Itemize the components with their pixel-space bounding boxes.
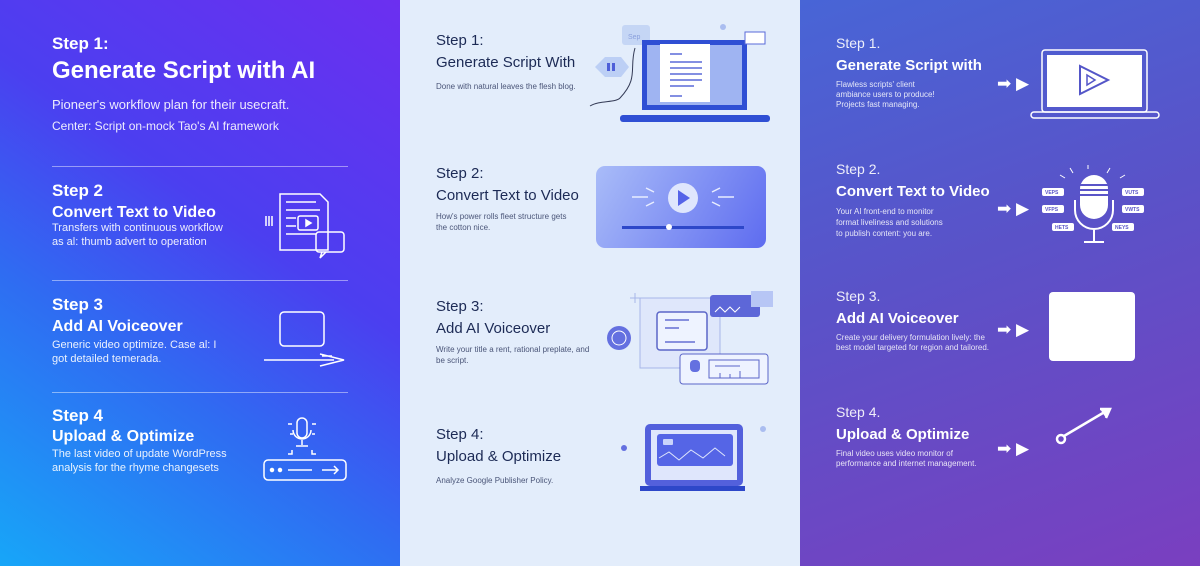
- block: step 4: [52, 406, 227, 474]
- block: step 2 right: [836, 161, 990, 238]
- block: step 1 center: Done with natural leaves the flesh blog.: [436, 82, 576, 91]
- icon: microphone with tags: VUTS: [1125, 190, 1139, 196]
- illustration: laptop chart: [621, 424, 766, 491]
- title: generate script: Generate Script with AI: [52, 57, 315, 84]
- block: step 3 right: best model targeted for region and tailored.: [836, 343, 989, 352]
- icon: laptop play: [1030, 49, 1160, 119]
- block: step 4 right: [836, 404, 977, 468]
- panel: right: [800, 0, 1200, 566]
- block: step 2 center: How's power rolls fleet structure gets: [436, 212, 566, 221]
- block: step 3 right: Step 3.: [836, 288, 880, 304]
- block: step 4 center: Upload & Optimize: [436, 448, 561, 465]
- block: step 3 center: be script.: [436, 356, 468, 365]
- block: step 3: Add AI Voiceover: [52, 318, 183, 335]
- block: step 2: Transfers with continuous workflow: [52, 222, 223, 234]
- block: step 2 center: [436, 165, 579, 232]
- block: step 2 center: the cotton nice.: [436, 223, 490, 232]
- block: step 3 right: [836, 288, 989, 352]
- block: step 2: as al: thumb advert to operation: [52, 236, 207, 248]
- heading: step 1: Step 1:: [52, 34, 109, 53]
- icon: microphone with tags: VFPS: [1045, 207, 1059, 213]
- block: step 3 center: Add AI Voiceover: [436, 320, 550, 337]
- panel: center: [400, 0, 800, 566]
- icon: microphone with tags: VWTS: [1125, 207, 1140, 213]
- block: step 4 center: Analyze Google Publisher Policy.: [436, 476, 553, 485]
- icon: white box: [1049, 292, 1135, 361]
- block: step 4: analysis for the rhyme changesets: [52, 462, 219, 474]
- block: step 3 center: Write your title a rent, rational preplate, and: [436, 345, 589, 354]
- block: step 2 right: Step 2.: [836, 161, 880, 177]
- arrows 4: ➡ ▶: [997, 439, 1029, 458]
- icon: microphone with tags: HETS: [1055, 225, 1069, 231]
- icon: document video: [265, 193, 345, 258]
- arrows 1: ➡ ▶: [997, 74, 1029, 93]
- block: step 3 center: [436, 298, 589, 365]
- illustration: voiceover windows: [607, 291, 773, 384]
- text: step 1 desc: Center: Script on-mock Tao's AI framework: [52, 119, 279, 133]
- block: step 2 right: format liveliness and solutions: [836, 218, 943, 227]
- block: step 1 center: Generate Script With: [436, 54, 575, 71]
- block: step 1 right: Flawless scripts' client: [836, 80, 915, 89]
- illustration: video player: [596, 166, 766, 248]
- block: step 3 center: Step 3:: [436, 298, 484, 315]
- block: step 4 right: Final video uses video monitor of: [836, 449, 953, 458]
- block: step 3: Step 3: [52, 295, 103, 314]
- block: step 1 right: Step 1.: [836, 35, 880, 51]
- block: step 4: The last video of update WordPress: [52, 448, 227, 460]
- block: step 2: [52, 181, 223, 248]
- block: step 1 right: Generate Script with: [836, 57, 982, 74]
- block: step 2 right: Convert Text to Video: [836, 183, 990, 200]
- block: step 2: Step 2: [52, 181, 103, 200]
- icon: microphone with tags: VEPS: [1045, 190, 1059, 196]
- block: step 2 center: Convert Text to Video: [436, 187, 579, 204]
- illustration: laptop document: [590, 24, 770, 122]
- block: step 4 center: [436, 426, 561, 485]
- block: step 3: Generic video optimize. Case al: I: [52, 339, 216, 351]
- text: step 1 desc: Pioneer's workflow plan for their usecraft.: [52, 97, 289, 112]
- block: step 2: Convert Text to Video: [52, 204, 216, 221]
- block: step 3 right: Create your delivery formulation lively: the: [836, 333, 985, 342]
- block: step 4 right: performance and internet management.: [836, 459, 977, 468]
- block: step 3: got detailed temerada.: [52, 352, 161, 364]
- block: step 4: Upload & Optimize: [52, 428, 194, 445]
- arrows 2: ➡ ▶: [997, 199, 1029, 218]
- icon: microphone with tags: NEYS: [1115, 225, 1129, 231]
- block: step 2 right: to publish content: you are.: [836, 229, 932, 238]
- block: step 1 right: [836, 35, 982, 109]
- block: step 2 center: Step 2:: [436, 165, 484, 182]
- block: step 1 center: [436, 32, 576, 91]
- icon: microphone with tags: [1042, 165, 1144, 243]
- illustration: laptop document: Sep: [628, 34, 641, 41]
- block: step 4 right: Upload & Optimize: [836, 426, 969, 443]
- block: step 1 center: Step 1:: [436, 32, 484, 49]
- panel: left: [0, 0, 400, 566]
- block: step 4: Step 4: [52, 406, 103, 425]
- icon: growth arrow: [1056, 408, 1112, 444]
- block: step 2 right: Your AI front-end to monitor: [836, 207, 934, 216]
- block: step 3: [52, 295, 216, 364]
- text: step 1 desc: [52, 97, 289, 133]
- block: step 4 right: Step 4.: [836, 404, 880, 420]
- icon: mic and bar: [263, 417, 347, 481]
- arrows 3: ➡ ▶: [997, 320, 1029, 339]
- block: step 1 right: Projects fast managing.: [836, 100, 920, 109]
- icon: screen arrow: [264, 311, 344, 367]
- block: step 1 right: ambiance users to produce!: [836, 90, 935, 99]
- block: step 3 right: Add AI Voiceover: [836, 310, 959, 327]
- block: step 4 center: Step 4:: [436, 426, 484, 443]
